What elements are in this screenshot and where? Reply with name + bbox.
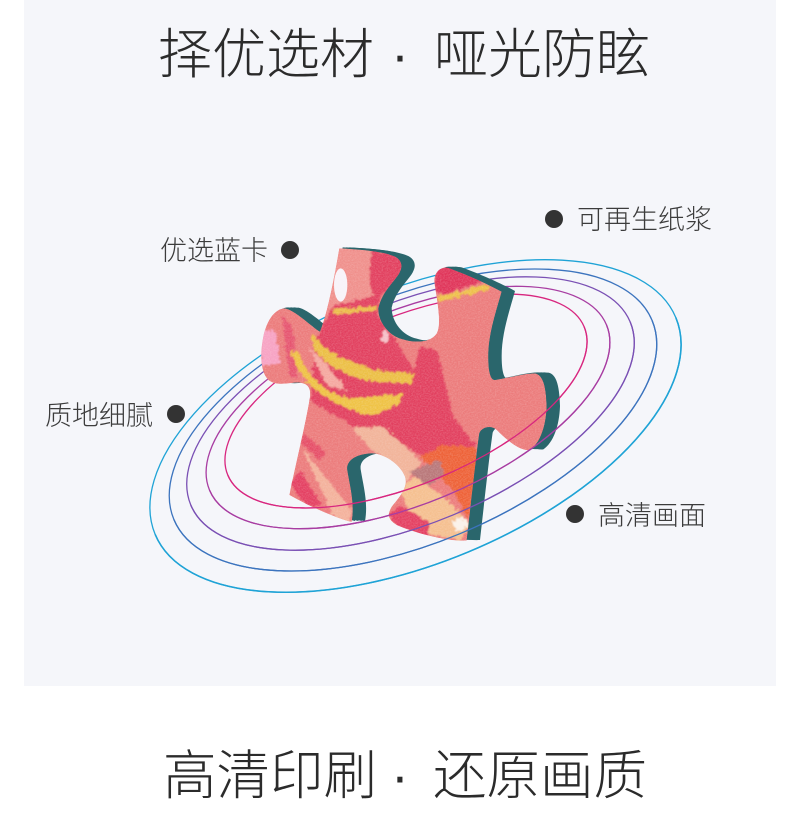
label: high definition: 高清画面	[598, 501, 706, 531]
title: bottom heading	[163, 747, 647, 806]
puzzle face artwork	[253, 243, 553, 547]
title: bottom heading: ·	[391, 747, 409, 806]
title: top heading: 哑光防眩	[434, 25, 650, 85]
title: top heading: ·	[391, 25, 409, 85]
orbit rings: front layer	[155, 318, 728, 660]
title: top heading	[158, 25, 650, 85]
bullet dots	[167, 210, 584, 523]
white highlight	[334, 268, 347, 302]
title: bottom heading: 高清印刷	[163, 747, 377, 806]
orbit rings: back layer	[103, 192, 728, 660]
label: fine texture: 质地细腻	[45, 401, 153, 431]
title: bottom heading: 还原画质	[433, 747, 647, 806]
puzzle piece	[253, 243, 560, 547]
title: top heading: 择优选材	[158, 25, 374, 85]
puzzle side wall	[265, 247, 560, 540]
label: blue card: 优选蓝卡	[160, 236, 268, 266]
fabric texture	[253, 243, 553, 547]
label: recycled pulp: 可再生纸浆	[577, 205, 712, 235]
diagram: puzzle piece with orbit rings	[149, 210, 682, 593]
panel: background	[24, 0, 776, 686]
